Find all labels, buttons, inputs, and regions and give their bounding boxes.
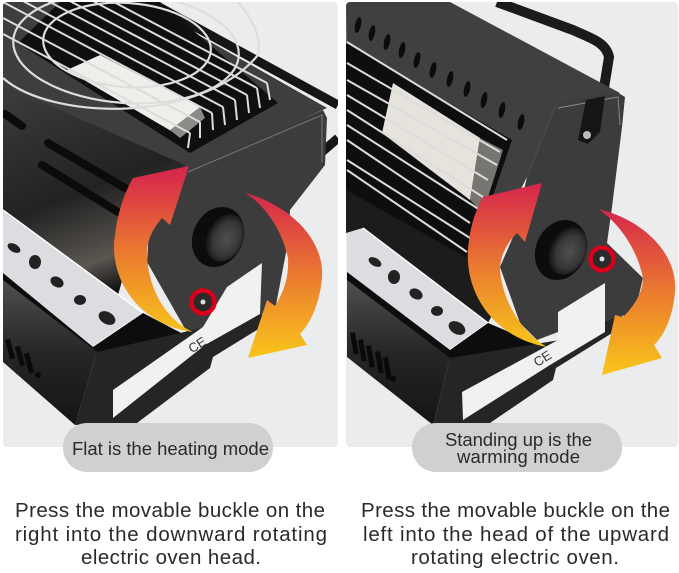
caption: heating mode instructions: electric oven head.: [81, 546, 261, 569]
black gap under label: [3, 273, 185, 360]
buckle highlight: [192, 290, 214, 314]
burner recess: [346, 43, 512, 260]
lower vents: [350, 332, 396, 382]
front lower dark face: [346, 190, 500, 323]
rotary knob: [525, 211, 597, 289]
pill label: warming mode: warming mode: [456, 446, 580, 467]
heater front face: [3, 85, 185, 313]
arrow: rotate up: [468, 183, 547, 347]
ceramic burner: [382, 83, 503, 213]
burner frame: [18, 2, 278, 153]
panel: heating mode photo: [3, 0, 338, 447]
heater carry handle: [150, 2, 338, 105]
rating label: [113, 263, 262, 418]
lower end body: [433, 315, 625, 425]
caption: warming mode instructions: left into the head of the upward: [363, 523, 669, 546]
pill label: heating mode: [63, 423, 273, 472]
rotary knob: [192, 207, 244, 267]
pill label: warming mode: Standing up is the: [445, 429, 592, 450]
panel background: [3, 2, 338, 447]
heater top handle: [497, 2, 609, 100]
caption: warming mode instructions: rotating electric oven.: [411, 546, 619, 569]
heater upper face: [346, 2, 620, 195]
warning label: [347, 228, 488, 350]
lower vents: [5, 339, 41, 378]
CE mark: CE: [186, 334, 209, 356]
arrow: rotate up: [114, 166, 193, 332]
grill wires: [3, 0, 270, 148]
grill wires: [347, 42, 507, 252]
panel background: [346, 2, 678, 447]
ceramic burner: [67, 55, 205, 138]
heater top face: [3, 2, 327, 170]
lower front body: [3, 280, 97, 425]
caption: heating mode instructions: right into the downward rotating: [15, 523, 327, 546]
arrow: rotate down: [598, 209, 675, 375]
CE mark: CE: [531, 347, 554, 370]
caption: heating mode instructions: Press the movable buckle on the: [15, 499, 325, 522]
caption: heating mode instructions: [15, 499, 327, 569]
warning label: [3, 210, 143, 347]
heater end panel: [147, 110, 327, 334]
front vent slots: [5, 114, 125, 212]
rating label: [462, 283, 605, 420]
pill label: warming mode: [412, 423, 622, 472]
black gap under label: [347, 272, 536, 360]
caption: warming mode instructions: Press the movable buckle on the: [361, 499, 670, 522]
arrow: rotate down: [245, 193, 322, 358]
vent slots: [353, 17, 526, 130]
panel: warming mode photo: [346, 2, 678, 447]
pill label: heating mode: Flat is the heating mode: [72, 438, 269, 459]
lower end body: [75, 314, 265, 425]
side strap and bolt: [325, 134, 338, 156]
handle bracket and bolt: [578, 96, 605, 144]
caption: warming mode instructions: [361, 499, 670, 569]
buckle highlight: [590, 248, 614, 270]
heater end panel: [500, 92, 643, 340]
lower front body: [347, 280, 450, 425]
round grill rings: [3, 0, 259, 111]
